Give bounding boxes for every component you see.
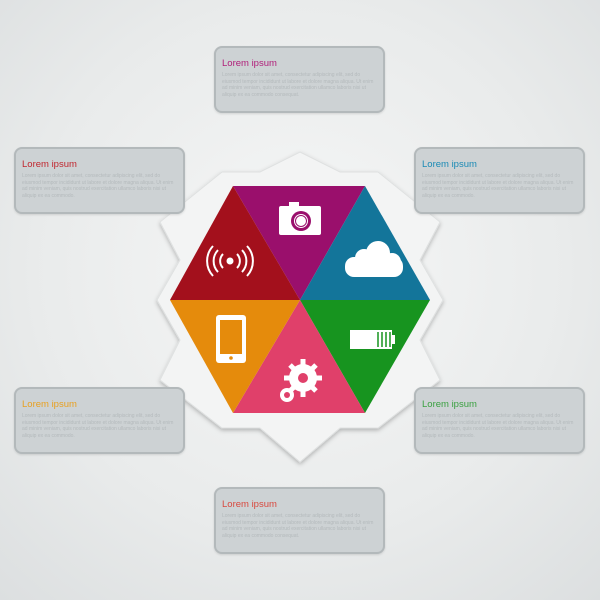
segment: battery (green) bbox=[300, 300, 430, 413]
box: left bottom bbox=[14, 387, 185, 454]
icon: battery bbox=[350, 330, 395, 349]
segment: gears (pink) bbox=[233, 300, 365, 413]
box: right bottom bbox=[414, 387, 585, 454]
box: left bottom: Lorem ipsum dolor sit amet, consectetur adipiscing elit, sed do eiusmod tempor incididunt ut labore et dolore magna aliqua. Ut enim ad minim veniam, quis nostrud exercitation ullamco laboris nisi ut aliquip ex ea commodo. bbox=[22, 413, 173, 438]
icon: cloud bbox=[345, 241, 403, 277]
box: left top: Lorem ipsum dolor sit amet, consectetur adipiscing elit, sed do eiusmod tempor incididunt ut labore et dolore magna aliqua. Ut enim ad minim veniam, quis nostrud exercitation ullamco laboris nisi ut aliquip ex ea commodo. bbox=[22, 173, 173, 198]
box: left top bbox=[14, 147, 185, 214]
box: right bottom: Lorem ipsum bbox=[422, 399, 477, 410]
box: top: Lorem ipsum dolor sit amet, consectetur adipiscing elit, sed do eiusmod tempor incididunt ut labore et dolore magna aliqua. Ut enim ad minim veniam, quis nostrud exercitation ullamco laboris nisi ut aliquip ex ea commodo consequat. bbox=[222, 72, 373, 98]
icon: phone bbox=[216, 315, 246, 363]
box: left bottom: Lorem ipsum bbox=[22, 399, 77, 410]
box: top: Lorem ipsum bbox=[222, 58, 277, 69]
segment: cloud (blue) bbox=[300, 186, 430, 300]
box: right top: Lorem ipsum dolor sit amet, consectetur adipiscing elit, sed do eiusmod tempor incididunt ut labore et dolore magna aliqua. Ut enim ad minim veniam, quis nostrud exercitation ullamco laboris nisi ut aliquip ex ea commodo. bbox=[422, 173, 573, 198]
box: bottom bbox=[214, 487, 385, 554]
icon: wifi bbox=[207, 246, 253, 276]
segment: phone (orange) bbox=[170, 300, 300, 413]
box: top bbox=[214, 46, 385, 113]
segment: camera (magenta) bbox=[233, 186, 365, 300]
icon: gears bbox=[280, 359, 322, 402]
box: left top: Lorem ipsum bbox=[22, 159, 77, 170]
icon: camera bbox=[279, 202, 321, 235]
box: bottom: Lorem ipsum dolor sit amet, consectetur adipiscing elit, sed do eiusmod tempor incididunt ut labore et dolore magna aliqua. Ut enim ad minim veniam, quis nostrud exercitation ullamco laboris nisi ut aliquip ex ea commodo consequat. bbox=[222, 513, 373, 538]
segment: wifi (red) bbox=[170, 186, 300, 300]
white star frame bbox=[157, 152, 443, 462]
box: right top: Lorem ipsum bbox=[422, 159, 477, 170]
box: bottom: Lorem ipsum bbox=[222, 499, 277, 510]
box: right bottom: Lorem ipsum dolor sit amet, consectetur adipiscing elit, sed do eiusmod tempor incididunt ut labore et dolore magna aliqua. Ut enim ad minim veniam, quis nostrud exercitation ullamco laboris nisi ut aliquip ex ea commodo. bbox=[422, 413, 573, 438]
box: right top bbox=[414, 147, 585, 214]
